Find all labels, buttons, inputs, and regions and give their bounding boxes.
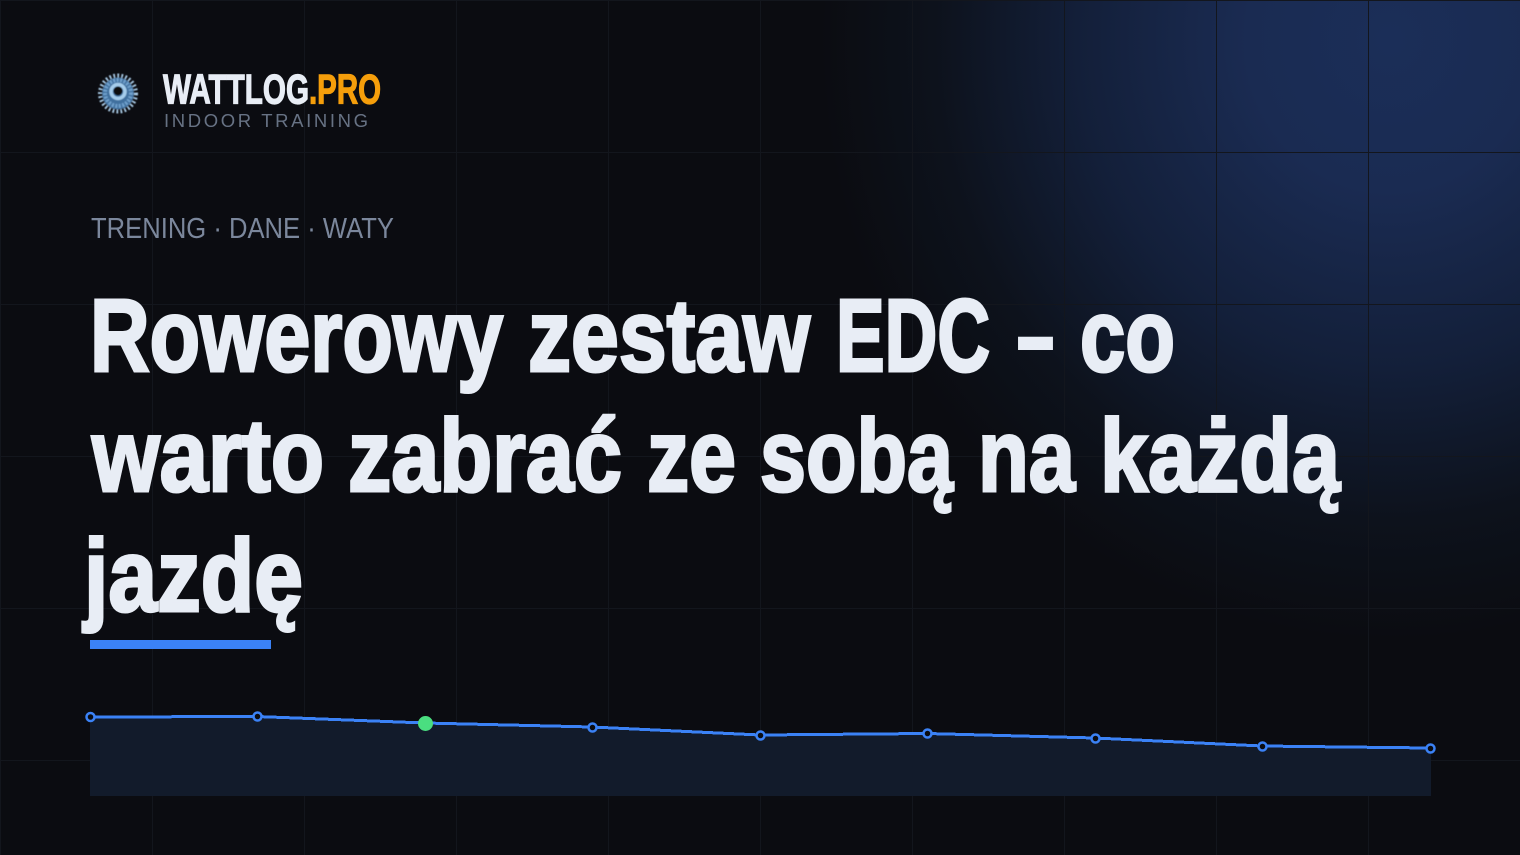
brand name: .PRO bbox=[309, 66, 381, 112]
title: ze bbox=[647, 398, 736, 513]
title: zestaw bbox=[528, 278, 811, 393]
title: jazdę bbox=[82, 518, 303, 633]
chart points bbox=[86, 712, 1434, 752]
brand name: WATTLOG bbox=[163, 66, 309, 112]
eyebrow text: TRENING · DANE · WATY bbox=[91, 213, 394, 245]
title: EDC bbox=[836, 278, 990, 393]
title underline accent bbox=[90, 640, 271, 649]
title: – bbox=[1017, 278, 1054, 393]
title: warto bbox=[91, 398, 324, 513]
icon: cassette gear logo bbox=[100, 76, 136, 112]
line chart bbox=[86, 712, 1434, 796]
title: Rowerowy bbox=[90, 278, 503, 393]
title: sobą bbox=[760, 398, 954, 513]
title: na bbox=[978, 398, 1076, 513]
title: zabrać bbox=[348, 398, 622, 513]
title: co bbox=[1080, 278, 1175, 393]
title bbox=[82, 278, 1341, 633]
highlighted green point bbox=[418, 716, 433, 731]
chart line bbox=[90, 716, 1430, 748]
brand tagline: INDOOR TRAINING bbox=[164, 110, 368, 131]
title: każdą bbox=[1100, 398, 1341, 513]
chart area fill bbox=[90, 716, 1431, 796]
